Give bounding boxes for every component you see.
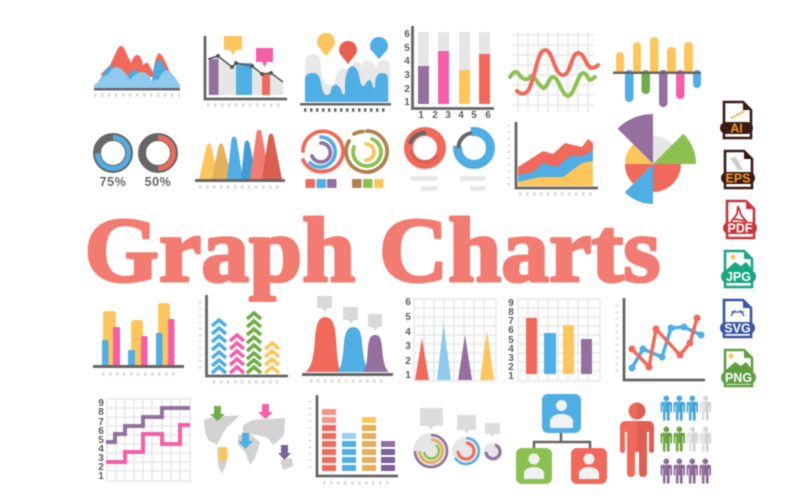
box: left bbox=[516, 448, 552, 484]
chart: segmented bars bbox=[310, 395, 398, 483]
icon: large person bbox=[620, 402, 654, 477]
arrow: blue bbox=[238, 433, 253, 449]
chart: triangles on grid: 6 bbox=[405, 297, 411, 308]
chart: triangles on grid: 4 bbox=[405, 327, 411, 338]
pin: yellow bbox=[317, 33, 335, 56]
chart: stacked progress bars 1-6: 1 bbox=[404, 97, 410, 108]
pin: red bbox=[339, 41, 357, 64]
chart: step lines on grid: 7 bbox=[98, 417, 104, 428]
chart: triangles on grid: 1 bbox=[405, 370, 411, 381]
icon: AI file bbox=[720, 102, 753, 138]
box: right bbox=[571, 448, 607, 484]
icon: AI file: AI bbox=[730, 122, 743, 136]
legend squares left bbox=[306, 179, 336, 188]
chart: step lines on grid: 6 bbox=[98, 426, 104, 437]
chart: donut 75 percent bbox=[97, 137, 129, 189]
chart: donut 50 percent bbox=[142, 137, 174, 189]
arrow: purple bbox=[278, 445, 291, 460]
chart: donut 75 percent: 75% bbox=[100, 175, 126, 189]
chart: bars on grid: 3 bbox=[508, 353, 514, 364]
chart: bars on grid: 5 bbox=[508, 335, 514, 346]
chart: donut 50 percent: 50% bbox=[145, 175, 171, 189]
chart: dual line with markers bbox=[617, 298, 705, 380]
chart: bars on grid bbox=[508, 298, 600, 382]
chart: stacked progress bars 1-6: 2 bbox=[432, 110, 438, 121]
chart: mountain area bbox=[94, 46, 180, 95]
chart: stacked progress bars 1-6: 6 bbox=[404, 29, 410, 40]
chart: bars on grid: 9 bbox=[508, 298, 514, 309]
chart: stacked progress bars 1-6 bbox=[404, 26, 494, 121]
chart: curved lines on grid bbox=[510, 32, 598, 112]
icon: EPS file bbox=[721, 151, 755, 188]
callout: pink bbox=[256, 48, 273, 67]
chart: bars on grid: 1 bbox=[508, 371, 514, 382]
chart: org chart bbox=[516, 394, 607, 484]
chart: donut blue with caption bars bbox=[458, 132, 490, 191]
chart: stacked progress bars 1-6: 2 bbox=[404, 84, 410, 95]
chart: step lines on grid: 2 bbox=[98, 462, 104, 473]
chart: triangle peaks bbox=[195, 130, 285, 187]
chart: step lines on grid: 8 bbox=[98, 407, 104, 418]
chart: up and down bars bbox=[613, 37, 701, 107]
chart: stacked progress bars 1-6: 5 bbox=[404, 43, 410, 54]
box: top bbox=[542, 394, 581, 433]
chart: stacked progress bars 1-6: 4 bbox=[458, 110, 464, 121]
title: Graph Charts bbox=[84, 199, 660, 301]
chart: wave with map pins bbox=[300, 33, 391, 110]
chart: stacked progress bars 1-6: 3 bbox=[404, 70, 410, 81]
arrow: yellow bbox=[217, 447, 229, 463]
chart: stacked progress bars 1-6: 4 bbox=[404, 56, 410, 67]
icon: SVG file bbox=[720, 300, 755, 337]
icon: PNG file: PNG bbox=[725, 371, 752, 385]
chart: bell curves with callouts bbox=[302, 296, 393, 381]
chart: step lines on grid: 9 bbox=[98, 398, 104, 409]
chart: bars on grid: 2 bbox=[508, 362, 514, 373]
chart: step lines on grid: 5 bbox=[98, 435, 104, 446]
chart: world map with arrows bbox=[204, 404, 293, 474]
legend squares right bbox=[352, 179, 384, 188]
arrow: green bbox=[210, 406, 225, 421]
arrow: pink bbox=[258, 404, 273, 419]
icon: PDF file bbox=[723, 201, 757, 238]
chart: donuts with callouts bbox=[413, 408, 502, 469]
icon: JPG file bbox=[721, 251, 756, 287]
chart: chevron columns bbox=[200, 295, 288, 382]
icon: JPG file: JPG bbox=[726, 270, 751, 284]
chart: triangles on grid: 5 bbox=[405, 312, 411, 323]
chart: bars on grid: 8 bbox=[508, 307, 514, 318]
chart: grouped bars bbox=[93, 303, 184, 374]
chart: step lines on grid: 3 bbox=[98, 453, 104, 464]
icon: PNG file bbox=[721, 350, 756, 386]
pin: blue bbox=[370, 37, 388, 59]
chart: concentric rings left bbox=[303, 131, 343, 188]
chart: bars on grid: 4 bbox=[508, 344, 514, 355]
chart: bars on grid: 7 bbox=[508, 316, 514, 327]
chart: triangles on grid bbox=[405, 297, 496, 381]
icon: EPS file: EPS bbox=[725, 172, 751, 186]
chart: stacked progress bars 1-6: 1 bbox=[418, 110, 424, 121]
chart: concentric rings right bbox=[346, 131, 387, 188]
chart: donut red with caption bars bbox=[408, 132, 442, 191]
icons: people grid bbox=[660, 395, 711, 484]
chart: triangles on grid: 2 bbox=[405, 356, 411, 367]
chart: step lines on grid: 1 bbox=[98, 471, 104, 482]
icon: PDF file: PDF bbox=[728, 222, 753, 236]
chart: stacked progress bars 1-6: 6 bbox=[485, 110, 491, 121]
chart: layered area bbox=[509, 122, 598, 194]
chart: step lines on grid: 4 bbox=[98, 444, 104, 455]
chart: triangles on grid: 3 bbox=[405, 341, 411, 352]
chart: bars on grid: 6 bbox=[508, 325, 514, 336]
callout: yellow bbox=[224, 36, 242, 55]
chart: stacked progress bars 1-6: 5 bbox=[471, 110, 477, 121]
chart: step lines on grid bbox=[98, 398, 190, 482]
icon: SVG file: SVG bbox=[724, 322, 751, 336]
chart: stacked progress bars 1-6: 3 bbox=[445, 110, 451, 121]
chart: polar area pie bbox=[618, 114, 696, 204]
chart: bars with trend line and callouts bbox=[205, 36, 287, 105]
